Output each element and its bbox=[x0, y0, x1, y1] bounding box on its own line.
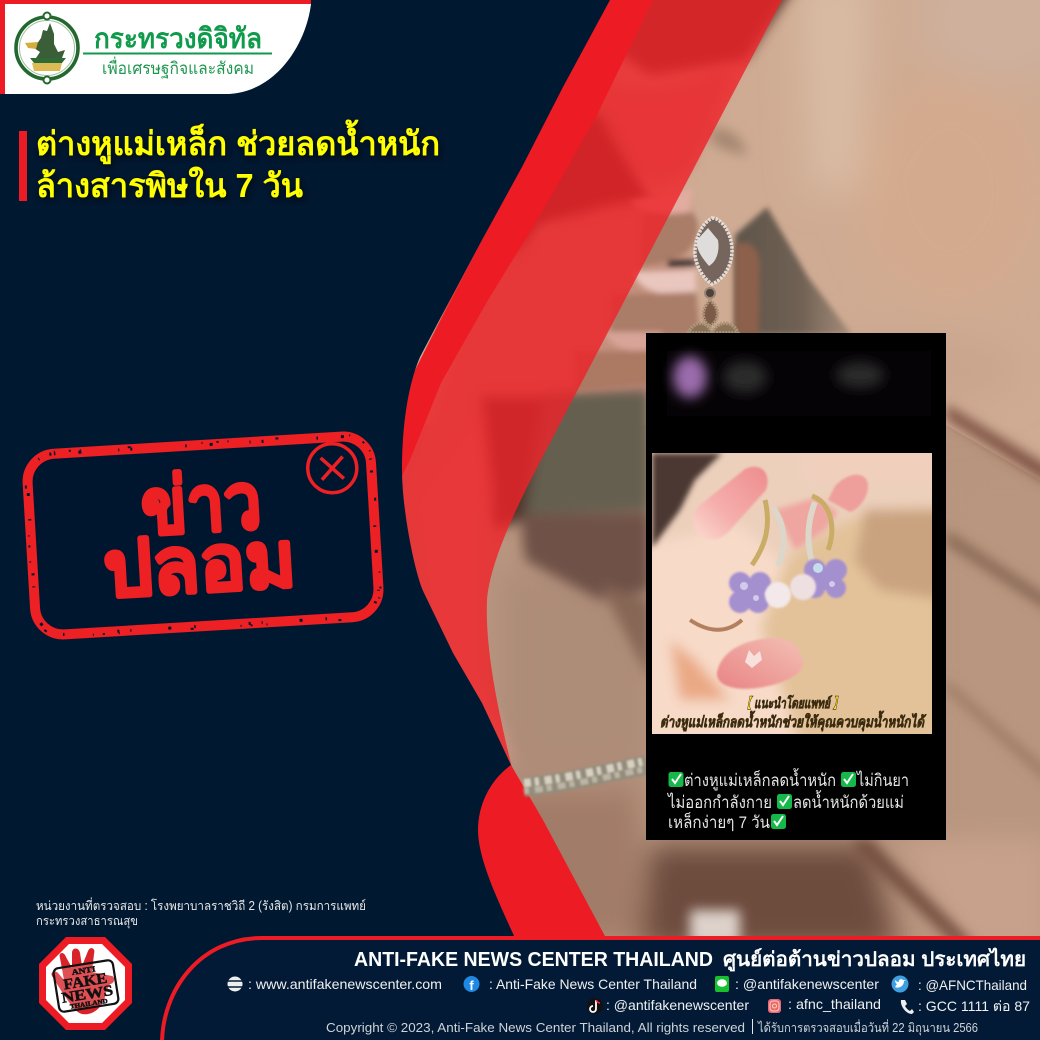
pearls bbox=[765, 582, 791, 608]
post caption: ลดน้ำหนักด้วยแม่ bbox=[793, 790, 904, 812]
contact: website: : www.antifakenewscenter.com bbox=[248, 976, 442, 992]
footer panel bbox=[162, 938, 1040, 1040]
palm top shadow bbox=[520, 512, 650, 600]
neck shadow bbox=[735, 207, 852, 335]
gold hoops bbox=[752, 500, 767, 565]
tilted news label: THAILAND bbox=[70, 998, 109, 1011]
navy left panel shape bbox=[0, 0, 610, 1040]
ear shadow bbox=[710, 128, 747, 156]
hair, dark, beneath the overlay bbox=[624, 0, 798, 76]
title block bbox=[19, 119, 440, 204]
ministry seal bbox=[16, 12, 78, 84]
post caption: ต่างหูแม่เหล็กลดน้ำหนัก bbox=[684, 768, 836, 791]
red corner bars bbox=[0, 0, 311, 94]
post caption: เหล็กง่ายๆ 7 วัน bbox=[668, 811, 770, 832]
caption bbox=[660, 694, 927, 732]
contact: line: : @antifakenewscenter bbox=[735, 976, 879, 992]
verifying agency note: หน่วยงานที่ตรวจสอบ : โรงพยาบาลราชวิถี 2 (รังสิต) กรมการแพทย์ bbox=[36, 897, 366, 913]
footer heading bbox=[354, 947, 1026, 973]
tilted news label: ANTI bbox=[71, 964, 96, 977]
tilted news label bbox=[53, 960, 119, 1012]
copyright line bbox=[326, 1019, 978, 1036]
solid red diagonal band bbox=[400, 0, 653, 480]
post caption: ไม่กินยา bbox=[855, 770, 909, 790]
lower hand base bbox=[380, 425, 1040, 940]
stamp wording bbox=[98, 455, 298, 614]
caption: ต่างหูแม่เหล็กลดน้ำหนักช่วยให้คุณควบคุมน้ำหนักได้ bbox=[660, 710, 927, 732]
octagon bbox=[39, 937, 132, 1030]
logo block bbox=[0, 0, 311, 94]
contact: facebook: : Anti-Fake News Center Thailand bbox=[489, 976, 697, 992]
hand beneath the overlay bbox=[510, 249, 693, 390]
stamp wording: ปลอม bbox=[101, 515, 298, 614]
contact: phone: : GCC 1111 ต่อ 87 bbox=[918, 998, 1030, 1014]
black card bbox=[646, 333, 946, 840]
translucent red overlay bbox=[400, 0, 782, 768]
blurred account header bbox=[667, 351, 931, 416]
lower nail bbox=[717, 638, 803, 689]
title text bbox=[36, 119, 440, 204]
footer heading: ศูนย์ต่อต้านข่าวปลอม ประเทศไทย bbox=[723, 947, 1026, 973]
caption: 【 แนะนำโดยแพทย์ 】 bbox=[741, 694, 843, 711]
post caption: ไม่ออกกำลังกาย bbox=[666, 792, 772, 812]
jaw and finger creases bbox=[946, 405, 1040, 484]
check mark icons bbox=[668, 772, 856, 829]
tilted news label: NEWS bbox=[60, 983, 114, 1007]
anti fake news badge bbox=[39, 937, 132, 1030]
ring bbox=[690, 620, 742, 630]
post screenshot bbox=[645, 333, 946, 840]
contact: twitter: : @AFNCThailand bbox=[918, 977, 1027, 993]
stamp x badge bbox=[306, 442, 358, 494]
verifying agency note bbox=[36, 897, 366, 929]
red hand bbox=[52, 948, 114, 1014]
stamp frame bbox=[26, 435, 380, 636]
stamp wording: ข่าว bbox=[139, 457, 264, 552]
upper finger nail bbox=[828, 475, 868, 512]
tagline: เพื่อเศรษฐกิจและสังคม bbox=[102, 56, 254, 79]
bracelet bbox=[524, 761, 646, 791]
white logo panel bbox=[5, 4, 311, 94]
contact: instagram: : afnc_thailand bbox=[788, 996, 881, 1012]
contact: facebook: f bbox=[469, 978, 474, 993]
finger details visible past the overlay bbox=[643, 211, 700, 267]
hair bbox=[652, 453, 722, 548]
title text: ต่างหูแม่เหล็ก ช่วยลดน้ำหนัก bbox=[36, 119, 440, 165]
product photo bbox=[652, 453, 932, 734]
photo: woman holding earring bbox=[380, 0, 1040, 950]
long nail bbox=[693, 467, 768, 539]
grunge specks bbox=[24, 433, 382, 638]
copyright line: ได้รับการตรวจสอบเมื่อวันที่ 22 มิถุนายน 2566 bbox=[757, 1019, 978, 1036]
title accent bar bbox=[19, 131, 27, 201]
title text: ล้างสารพิษใน 7 วัน bbox=[36, 166, 303, 204]
fake news stamp bbox=[24, 433, 382, 638]
green rule bbox=[83, 52, 272, 54]
earring on ear bbox=[688, 218, 738, 333]
footer heading: ANTI-FAKE NEWS CENTER THAILAND bbox=[354, 949, 713, 971]
contact: tiktok: : @antifakenewscenter bbox=[606, 997, 749, 1013]
olive background bbox=[525, 388, 650, 515]
verifying agency note: กระทรวงสาธารณสุข bbox=[36, 914, 138, 929]
purple crystals bbox=[729, 559, 847, 613]
copyright line: Copyright © 2023, Anti-Fake News Center Thailand, All rights reserved bbox=[326, 1021, 745, 1035]
ministry name: กระทรวงดิจิทัล bbox=[94, 23, 262, 54]
red blob at bottom of the curve bbox=[478, 765, 606, 938]
tilted news label: FAKE bbox=[62, 971, 108, 993]
post caption bbox=[666, 768, 909, 832]
